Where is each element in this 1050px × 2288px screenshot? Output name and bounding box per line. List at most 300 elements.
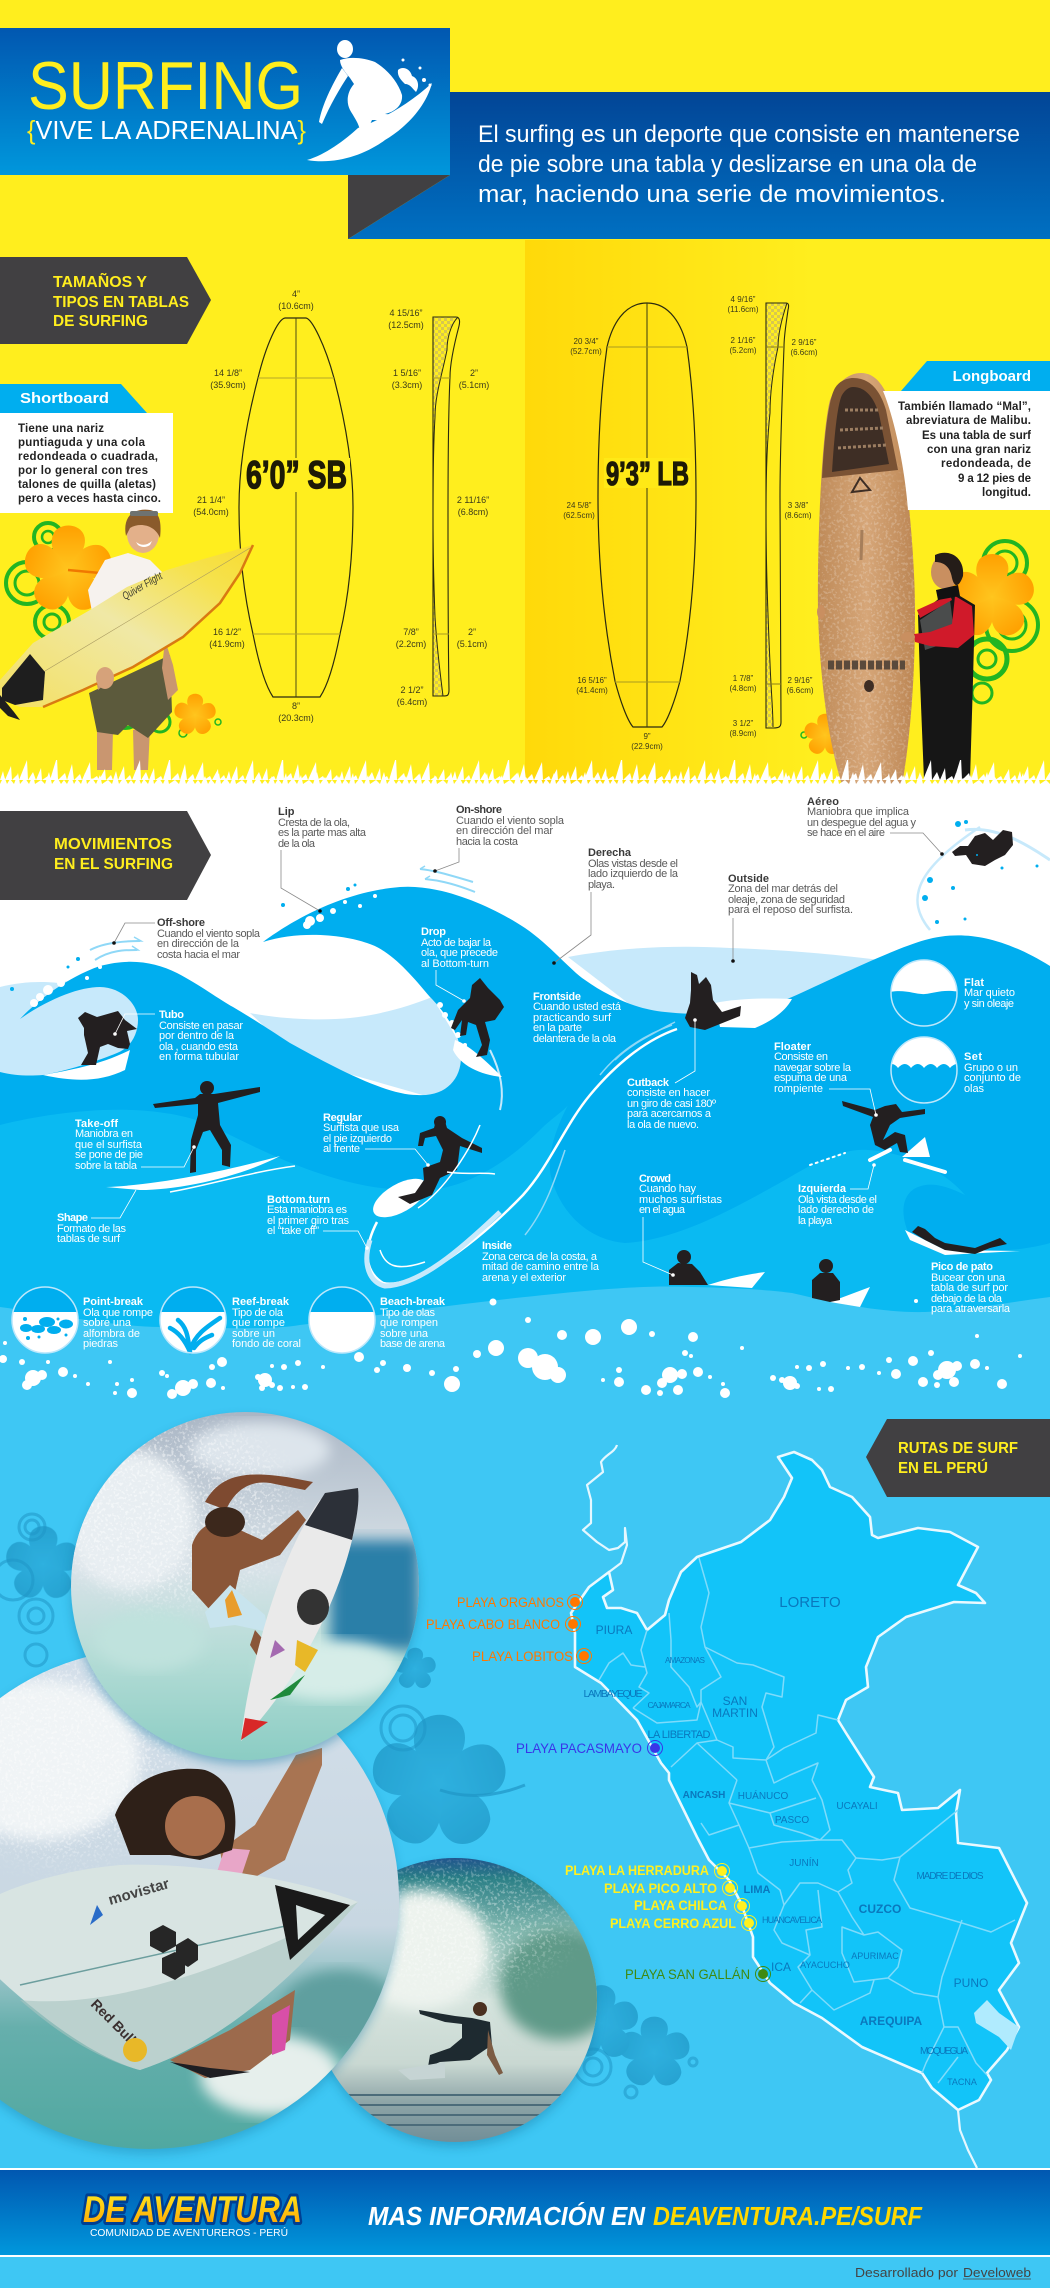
surfboard <box>0 545 253 707</box>
text: cutback: Cutback <box>627 1077 670 1089</box>
description: 9 a 12 pies de <box>958 473 1031 485</box>
text: tubo: ola , cuando esta <box>159 1041 239 1053</box>
text: frontside: Frontside <box>533 991 581 1003</box>
shortboard dimensions: 2” <box>470 368 478 378</box>
region names: JUNÍN <box>789 1856 819 1869</box>
description: con una gran nariz <box>927 444 1031 456</box>
text: floater: espuma de una <box>774 1072 848 1084</box>
text: set: conjunto de <box>964 1072 1021 1084</box>
longboard dimensions: (8.6cm) <box>784 511 812 520</box>
shortboard dimensions: 2” <box>468 627 476 637</box>
text: point-break: piedras <box>83 1338 118 1350</box>
text: cutback: un giro de casi 180º <box>627 1098 716 1110</box>
map markers: yellow beaches: PLAYA PICO ALTO <box>604 1881 717 1896</box>
text: crowd: Crowd <box>639 1173 671 1185</box>
shortboard dimensions: (10.6cm) <box>278 301 314 311</box>
map markers: yellow beaches: PLAYA CHILCA <box>634 1898 727 1913</box>
intro text block: El surfing es un deporte que consiste en mantenerse <box>478 121 1020 148</box>
text: drop <box>421 926 498 970</box>
text: izquierda: lado derecho de <box>798 1204 874 1216</box>
panel: longboard callout <box>883 361 1050 510</box>
text: shape <box>57 1212 126 1245</box>
text: pico de pato: para atraversarla <box>931 1303 1011 1315</box>
longboard dimensions: 1 7/8” <box>733 674 754 683</box>
map markers: yellow beaches <box>565 1863 756 1931</box>
longboard dimensions: 3 1/2” <box>733 719 754 728</box>
text: shape: Formato de las <box>57 1223 126 1235</box>
longboard dimensions: (52.7cm) <box>570 347 602 356</box>
text: cutback: para acercarnos a <box>627 1108 712 1120</box>
text: take-off <box>75 1118 143 1172</box>
logo: DE AVENTURA <box>83 2189 302 2230</box>
text: izquierda: Ola vista desde el <box>798 1194 877 1206</box>
text: off-shore: Off-shore <box>157 917 205 929</box>
description <box>18 423 161 505</box>
text: inside: Zona cerca de la costa, a <box>482 1251 598 1263</box>
description: talones de quilla (aletas) <box>18 479 156 491</box>
text: lip <box>278 806 367 850</box>
country outline <box>571 1452 1027 2110</box>
Chile border <box>958 2110 977 2168</box>
icon: take-off surfer <box>106 1081 295 1192</box>
boardshorts <box>205 1585 268 1632</box>
text: take-off: Take-off <box>75 1118 118 1130</box>
text: bottom turn: el primer giro tras <box>267 1215 350 1227</box>
text: crowd <box>639 1173 722 1216</box>
shortboard dimensions: 7/8” <box>403 627 419 637</box>
text: pico de pato: Pico de pato <box>931 1261 993 1273</box>
text: floater: navegar sobre la <box>774 1062 852 1074</box>
photo: female surfer, large circle: Red Bull <box>88 1996 139 2047</box>
map markers: yellow beaches: PLAYA CERRO AZUL <box>610 1916 736 1931</box>
shortboard dimensions: 2 11/16” <box>457 495 489 505</box>
map markers: northern orange beaches: PLAYA ORGANOS <box>457 1595 564 1610</box>
shortboard dimensions: 4” <box>292 289 300 299</box>
longboard dimensions: (6.6cm) <box>786 686 814 695</box>
region names: CUZCO <box>859 1902 901 1916</box>
text: beach-break: que rompen <box>380 1317 438 1329</box>
panel: longboard callout: Longboard <box>953 368 1031 385</box>
text: beach-break: base de arena <box>380 1338 446 1350</box>
shortboard dimensions <box>193 289 489 723</box>
text: lip: Cresta de la ola, <box>278 817 350 829</box>
icon: cutback surfer <box>685 972 792 1030</box>
shortboard dimensions: 14 1/8” <box>214 368 242 378</box>
text: aereo: un despegue del agua y <box>807 817 916 829</box>
text: lip: de la ola <box>278 838 316 850</box>
call to action: MAS INFORMACIÓN EN <box>368 2201 646 2231</box>
Lake Titicaca <box>974 2000 1019 2050</box>
panel: shortboard callout <box>0 384 173 513</box>
text: on-shore: en dirección del mar <box>456 825 553 837</box>
Ecuador border <box>583 1445 627 1572</box>
chart: longboard outline 9'3" LB <box>598 303 696 727</box>
text: bottom turn: Esta maniobra es <box>267 1204 348 1216</box>
photo: surfer in barrel, lower circle <box>328 1858 599 2150</box>
text: drop: al Bottom-turn <box>421 958 489 970</box>
region names: TACNA <box>947 2077 977 2087</box>
heading: tamaños y tipos <box>0 257 211 344</box>
icon: point-break circle <box>10 1285 80 1353</box>
text: frontside: practicando surf <box>533 1012 612 1024</box>
longboard dimensions: (11.6cm) <box>728 305 759 314</box>
icon: surfer in tube <box>43 1011 137 1080</box>
text: point-break: sobre una <box>83 1317 132 1329</box>
longboard dimensions: 9” <box>643 732 651 741</box>
text: tubo: Tubo <box>159 1009 184 1021</box>
text: beach-break <box>380 1296 446 1350</box>
icon: regular surfer <box>367 1116 495 1225</box>
region names: MOQUEGUA <box>920 2046 968 2057</box>
region names: LIMA <box>744 1884 770 1896</box>
region names: CAJAMARCA <box>648 1700 691 1710</box>
head <box>127 515 159 553</box>
text: bottom turn <box>267 1194 350 1237</box>
icon: left flowers and rings <box>6 523 221 737</box>
map: Peru <box>571 1445 1027 2168</box>
text: off-shore: costa hacia el mar <box>157 949 240 961</box>
region names: SAN <box>723 1694 747 1708</box>
text: flat: y sin oleaje <box>964 998 1014 1010</box>
icon: set waves circle <box>890 1036 958 1104</box>
text: off-shore: Cuando el viento sopla <box>157 928 261 940</box>
photo: shortboard surfer: Quiver Flight <box>120 570 165 603</box>
text: izquierda: la playa <box>798 1215 833 1227</box>
text: regular: Surfista que usa <box>323 1122 400 1134</box>
text: outside: Outside <box>728 873 769 885</box>
shortboard dimensions: (20.3cm) <box>278 713 314 723</box>
text: derecha: Derecha <box>588 847 632 859</box>
longboard dimensions: (4.8cm) <box>729 684 757 693</box>
panel: title banner <box>0 28 450 175</box>
text: set: olas <box>964 1083 984 1095</box>
arm and torso <box>220 1748 322 1880</box>
region names: AREQUIPA <box>860 2014 923 2028</box>
red sleeve <box>914 596 974 648</box>
text: frontside: en la parte <box>533 1022 582 1034</box>
text: crowd: muchos surfistas <box>639 1194 722 1206</box>
description: por lo general con tres <box>18 465 148 477</box>
text: set: Set <box>964 1051 982 1063</box>
text: cutback: la ola de nuevo. <box>627 1119 699 1131</box>
text: on-shore: On-shore <box>456 804 502 816</box>
shortboard dimensions: 8” <box>292 701 300 711</box>
text: tubo <box>159 1009 243 1063</box>
credit line <box>855 2265 1031 2280</box>
text: derecha: playa. <box>588 879 615 891</box>
face <box>165 1796 225 1856</box>
shortboard dimensions: (6.8cm) <box>458 507 488 517</box>
text: cutback: consiste en hacer <box>627 1087 710 1099</box>
chart: longboard side profile <box>766 303 789 728</box>
longboard dimensions: (5.2cm) <box>729 346 757 355</box>
leader lines <box>91 833 942 1275</box>
photo: male surfer, top circle <box>50 1410 420 1765</box>
heading: rutas de surf <box>866 1419 1050 1497</box>
icon: floater surfer <box>810 1101 945 1172</box>
longboard dimensions: (22.9cm) <box>631 742 663 751</box>
shortboard dimensions: (3.3cm) <box>392 380 422 390</box>
text: reef-break <box>232 1296 301 1350</box>
text: on-shore: Cuando el viento sopla <box>456 815 565 827</box>
surfer <box>419 2002 503 2075</box>
text: inside <box>482 1240 600 1284</box>
region borders <box>599 1558 1015 2083</box>
text: izquierda: Izquierda <box>798 1183 847 1195</box>
logo: COMUNIDAD DE AVENTUREROS - PERÚ <box>90 2226 288 2239</box>
text: crowd: Cuando hay <box>639 1183 696 1195</box>
label <box>0 384 147 413</box>
surfboard <box>241 1488 358 1741</box>
text: point-break: alfombra de <box>83 1328 140 1340</box>
text: cutback <box>627 1077 716 1131</box>
text: lip: Lip <box>278 806 295 818</box>
t-shirt <box>88 553 170 660</box>
shortboard dimensions: 21 1/4” <box>197 495 225 505</box>
text: bottom turn: Bottom.turn <box>267 1194 330 1206</box>
credit line: Desarrollado por <box>855 2265 959 2280</box>
region names: HUÁNUCO <box>738 1789 788 1802</box>
text: point-break <box>83 1296 153 1350</box>
map markers: northern orange beaches <box>426 1594 592 1664</box>
region names: LORETO <box>779 1594 841 1611</box>
grass fringe <box>0 760 1050 793</box>
icon: duck dive surfer <box>905 1226 1020 1255</box>
title: SURFING <box>28 48 303 124</box>
text: on-shore: hacia la costa <box>456 836 519 848</box>
intro text block: mar, haciendo una serie de movimientos. <box>478 181 946 208</box>
label <box>901 361 1050 391</box>
text: derecha: lado izquierdo de la <box>588 868 679 880</box>
text: take-off: Maniobra en <box>75 1128 133 1140</box>
panel: intro text <box>348 92 1050 239</box>
text: take-off: se pone de pie <box>75 1149 143 1161</box>
longboard dimensions: 4 9/16” <box>731 295 756 304</box>
description: Tiene una nariz <box>18 423 104 435</box>
region names: LA LIBERTAD <box>648 1729 711 1741</box>
text: floater: Consiste en <box>774 1051 828 1063</box>
region names <box>584 1594 988 2087</box>
region names: MARTIN <box>712 1706 758 1720</box>
heading: movimientos <box>0 811 211 900</box>
text: inside: arena y el exterior <box>482 1272 566 1284</box>
region names: UCAYALI <box>836 1801 878 1812</box>
call to action: DEAVENTURA.PE/SURF <box>653 2201 923 2231</box>
heading: movimientos: EN EL SURFING <box>54 856 173 873</box>
text: aereo: Aéreo <box>807 796 839 808</box>
surfboard <box>0 1865 358 2070</box>
hand <box>901 632 915 642</box>
shortboard dimensions: (6.4cm) <box>397 697 427 707</box>
text: pico de pato: debajo de la ola <box>931 1293 1003 1305</box>
text: derecha: Olas vistas desde el <box>588 858 678 870</box>
text: pico de pato: tabla de surf por <box>931 1282 1008 1294</box>
photo: female surfer, large circle: movistar <box>106 1875 171 1909</box>
shortboard dimensions: (2.2cm) <box>396 639 426 649</box>
text: take-off: que el surfista <box>75 1139 143 1151</box>
text: reef-break: que rompe <box>232 1317 285 1329</box>
text: reef-break: fondo de coral <box>232 1338 301 1350</box>
longboard dimensions: 2 9/16” <box>788 676 813 685</box>
text: shape: Shape <box>57 1212 88 1224</box>
text: drop: Drop <box>421 926 446 938</box>
text: bottom turn: el “take off” <box>267 1225 319 1237</box>
traction pad <box>2 654 45 705</box>
region names: ICA <box>771 1960 791 1974</box>
longboard dimensions: 24 5/8” <box>567 501 592 510</box>
swoosh trails <box>367 1022 677 1286</box>
chart: shortboard side profile <box>433 317 460 696</box>
text: take-off: sobre la tabla <box>75 1160 138 1172</box>
icon: aerial surfer <box>917 820 1050 930</box>
icon: reef-break circle <box>158 1285 228 1353</box>
chart: shortboard outline 6'0" SB <box>239 318 353 697</box>
region names: AMAZONAS <box>665 1656 705 1665</box>
text: inside: mitad de camino entre la <box>482 1261 600 1273</box>
text: frontside: Cuando usted está <box>533 1001 622 1013</box>
text: tubo: en forma tubular <box>159 1051 239 1063</box>
map markers: yellow beaches: PLAYA LA HERRADURA <box>565 1863 709 1878</box>
shortboard dimensions: 4 15/16” <box>389 308 423 318</box>
shortboard dimensions: 1 5/16” <box>393 368 421 378</box>
wind and spray details <box>30 890 467 1047</box>
text: outside: Zona del mar detrás del <box>728 883 838 895</box>
region names: HUANCAVELICA <box>762 1915 822 1925</box>
text: beach-break: sobre una <box>380 1328 429 1340</box>
yellow background: boards section <box>0 0 1050 790</box>
photo: female surfer, large circle <box>0 1645 410 2155</box>
text: outside: oleaje, zona de seguridad <box>728 894 845 906</box>
text: off-shore: en dirección de la <box>157 938 240 950</box>
text: beach-break: Tipo de olas <box>380 1307 436 1319</box>
text: off-shore <box>157 917 261 961</box>
longboard dimensions: 16 5/16” <box>577 676 607 685</box>
region names: ANCASH <box>683 1790 725 1801</box>
text: aereo <box>807 796 916 839</box>
board size label: 9’3” LB <box>606 455 689 492</box>
text: pico de pato <box>931 1261 1011 1315</box>
shortboard dimensions: 2 1/2” <box>400 685 424 695</box>
fold shadow <box>348 175 450 239</box>
text: floater: rompiente <box>774 1083 823 1095</box>
legs <box>97 725 150 770</box>
intro text block <box>478 121 1020 208</box>
text: flat: Flat <box>964 977 984 989</box>
text: set: Grupo o un <box>964 1062 1018 1074</box>
longboard dimensions: 2 9/16” <box>792 338 817 347</box>
text: regular <box>323 1112 400 1155</box>
longboard dimensions: 20 3/4” <box>574 337 599 346</box>
region names: MADRE DE DIOS <box>916 1871 984 1882</box>
longboard dimensions: 2 1/16” <box>731 336 756 345</box>
text: floater <box>774 1041 852 1095</box>
description: abreviatura de Malibu. <box>906 415 1031 427</box>
panel: footer banner <box>0 2168 1050 2257</box>
shortboard dimensions: (41.9cm) <box>209 639 245 649</box>
panel: shortboard callout: Shortboard <box>20 390 109 407</box>
region names: LAMBAYEQUE <box>584 1688 642 1700</box>
icon: beach-break circle <box>307 1285 377 1353</box>
text: pico de pato: Bucear con una <box>931 1272 1006 1284</box>
text: on-shore <box>456 804 565 848</box>
shortboard dimensions: (35.9cm) <box>210 380 246 390</box>
text: point-break: Point-break <box>83 1296 144 1308</box>
heading: movimientos: MOVIMIENTOS <box>54 836 172 853</box>
text: shape: tablas de surf <box>57 1233 121 1245</box>
light shore band <box>0 1287 1050 2288</box>
board logos <box>275 1885 350 1960</box>
text: drop: Acto de bajar la <box>421 937 492 949</box>
photo: longboard surfboard <box>818 373 915 784</box>
longboard dimensions <box>563 295 818 751</box>
text: regular: Regular <box>323 1112 363 1124</box>
head <box>931 555 959 589</box>
text: tubo: Consiste en pasar <box>159 1020 243 1032</box>
longboard dimensions: (6.6cm) <box>790 348 818 357</box>
heading: rutas de surf: EN EL PERÚ <box>898 1458 988 1477</box>
icon: white surfer silhouette <box>307 40 432 161</box>
text: set <box>964 1051 1021 1095</box>
text: inside: Inside <box>482 1240 512 1252</box>
longboard dimensions: (62.5cm) <box>563 511 595 520</box>
text: reef-break: Tipo de ola <box>232 1307 284 1319</box>
text: drop: ola, que precede <box>421 947 498 959</box>
hand <box>96 667 114 689</box>
shortboard dimensions: (12.5cm) <box>388 320 424 330</box>
text: izquierda <box>798 1183 877 1227</box>
credit line: Develoweb <box>963 2265 1031 2280</box>
text: frontside: delantera de la ola <box>533 1033 617 1045</box>
shortboard dimensions: (5.1cm) <box>457 639 487 649</box>
region names: PIURA <box>596 1623 632 1637</box>
description: También llamado “Mal”, <box>898 401 1031 413</box>
icon: crowd surfers <box>669 1250 870 1307</box>
map markers: northern orange beaches: PLAYA LOBITOS <box>472 1649 573 1664</box>
shortboard dimensions: (5.1cm) <box>459 380 489 390</box>
text: outside <box>728 873 853 916</box>
shortboard dimensions: (54.0cm) <box>193 507 229 517</box>
longboard dimensions: 3 3/8” <box>788 501 809 510</box>
region names: PASCO <box>775 1815 809 1826</box>
text: derecha <box>588 847 679 891</box>
hair <box>115 1769 235 1860</box>
surfer body <box>205 1475 313 1510</box>
text: tubo: por dentro de la <box>159 1030 235 1042</box>
description: pero a veces hasta cinco. <box>18 493 161 505</box>
map marker: Pacasmayo: PLAYA PACASMAYO <box>516 1741 642 1756</box>
board size label: 6’0” SB <box>246 454 347 497</box>
longboard dimensions: (41.4cm) <box>576 686 608 695</box>
heading: tamaños y tipos: TAMAÑOS Y <box>53 271 147 291</box>
call to action <box>368 2201 923 2231</box>
text: floater: Floater <box>774 1041 812 1053</box>
text: regular: el pie izquierdo <box>323 1133 392 1145</box>
text: lip: es la parte mas alta <box>278 827 367 839</box>
arms <box>91 610 110 690</box>
background hibiscus flowers <box>0 1514 697 2098</box>
map markers: northern orange beaches: PLAYA CABO BLANCO <box>426 1617 560 1632</box>
text: outside: para el reposo del surfista. <box>728 904 853 916</box>
text: aereo: se hace en el aire <box>807 827 885 839</box>
intro text block: de pie sobre una tabla y deslizarse en una ola de <box>478 151 977 178</box>
text: reef-break: Reef-break <box>232 1296 290 1308</box>
region names: PUNO <box>954 1976 988 1990</box>
photo: shortboard surfer <box>0 510 253 770</box>
description <box>898 401 1031 499</box>
shorts <box>89 655 172 738</box>
subtitle: {VIVE LA ADRENALINA} <box>27 115 306 145</box>
icon: drop surfer <box>451 978 504 1077</box>
